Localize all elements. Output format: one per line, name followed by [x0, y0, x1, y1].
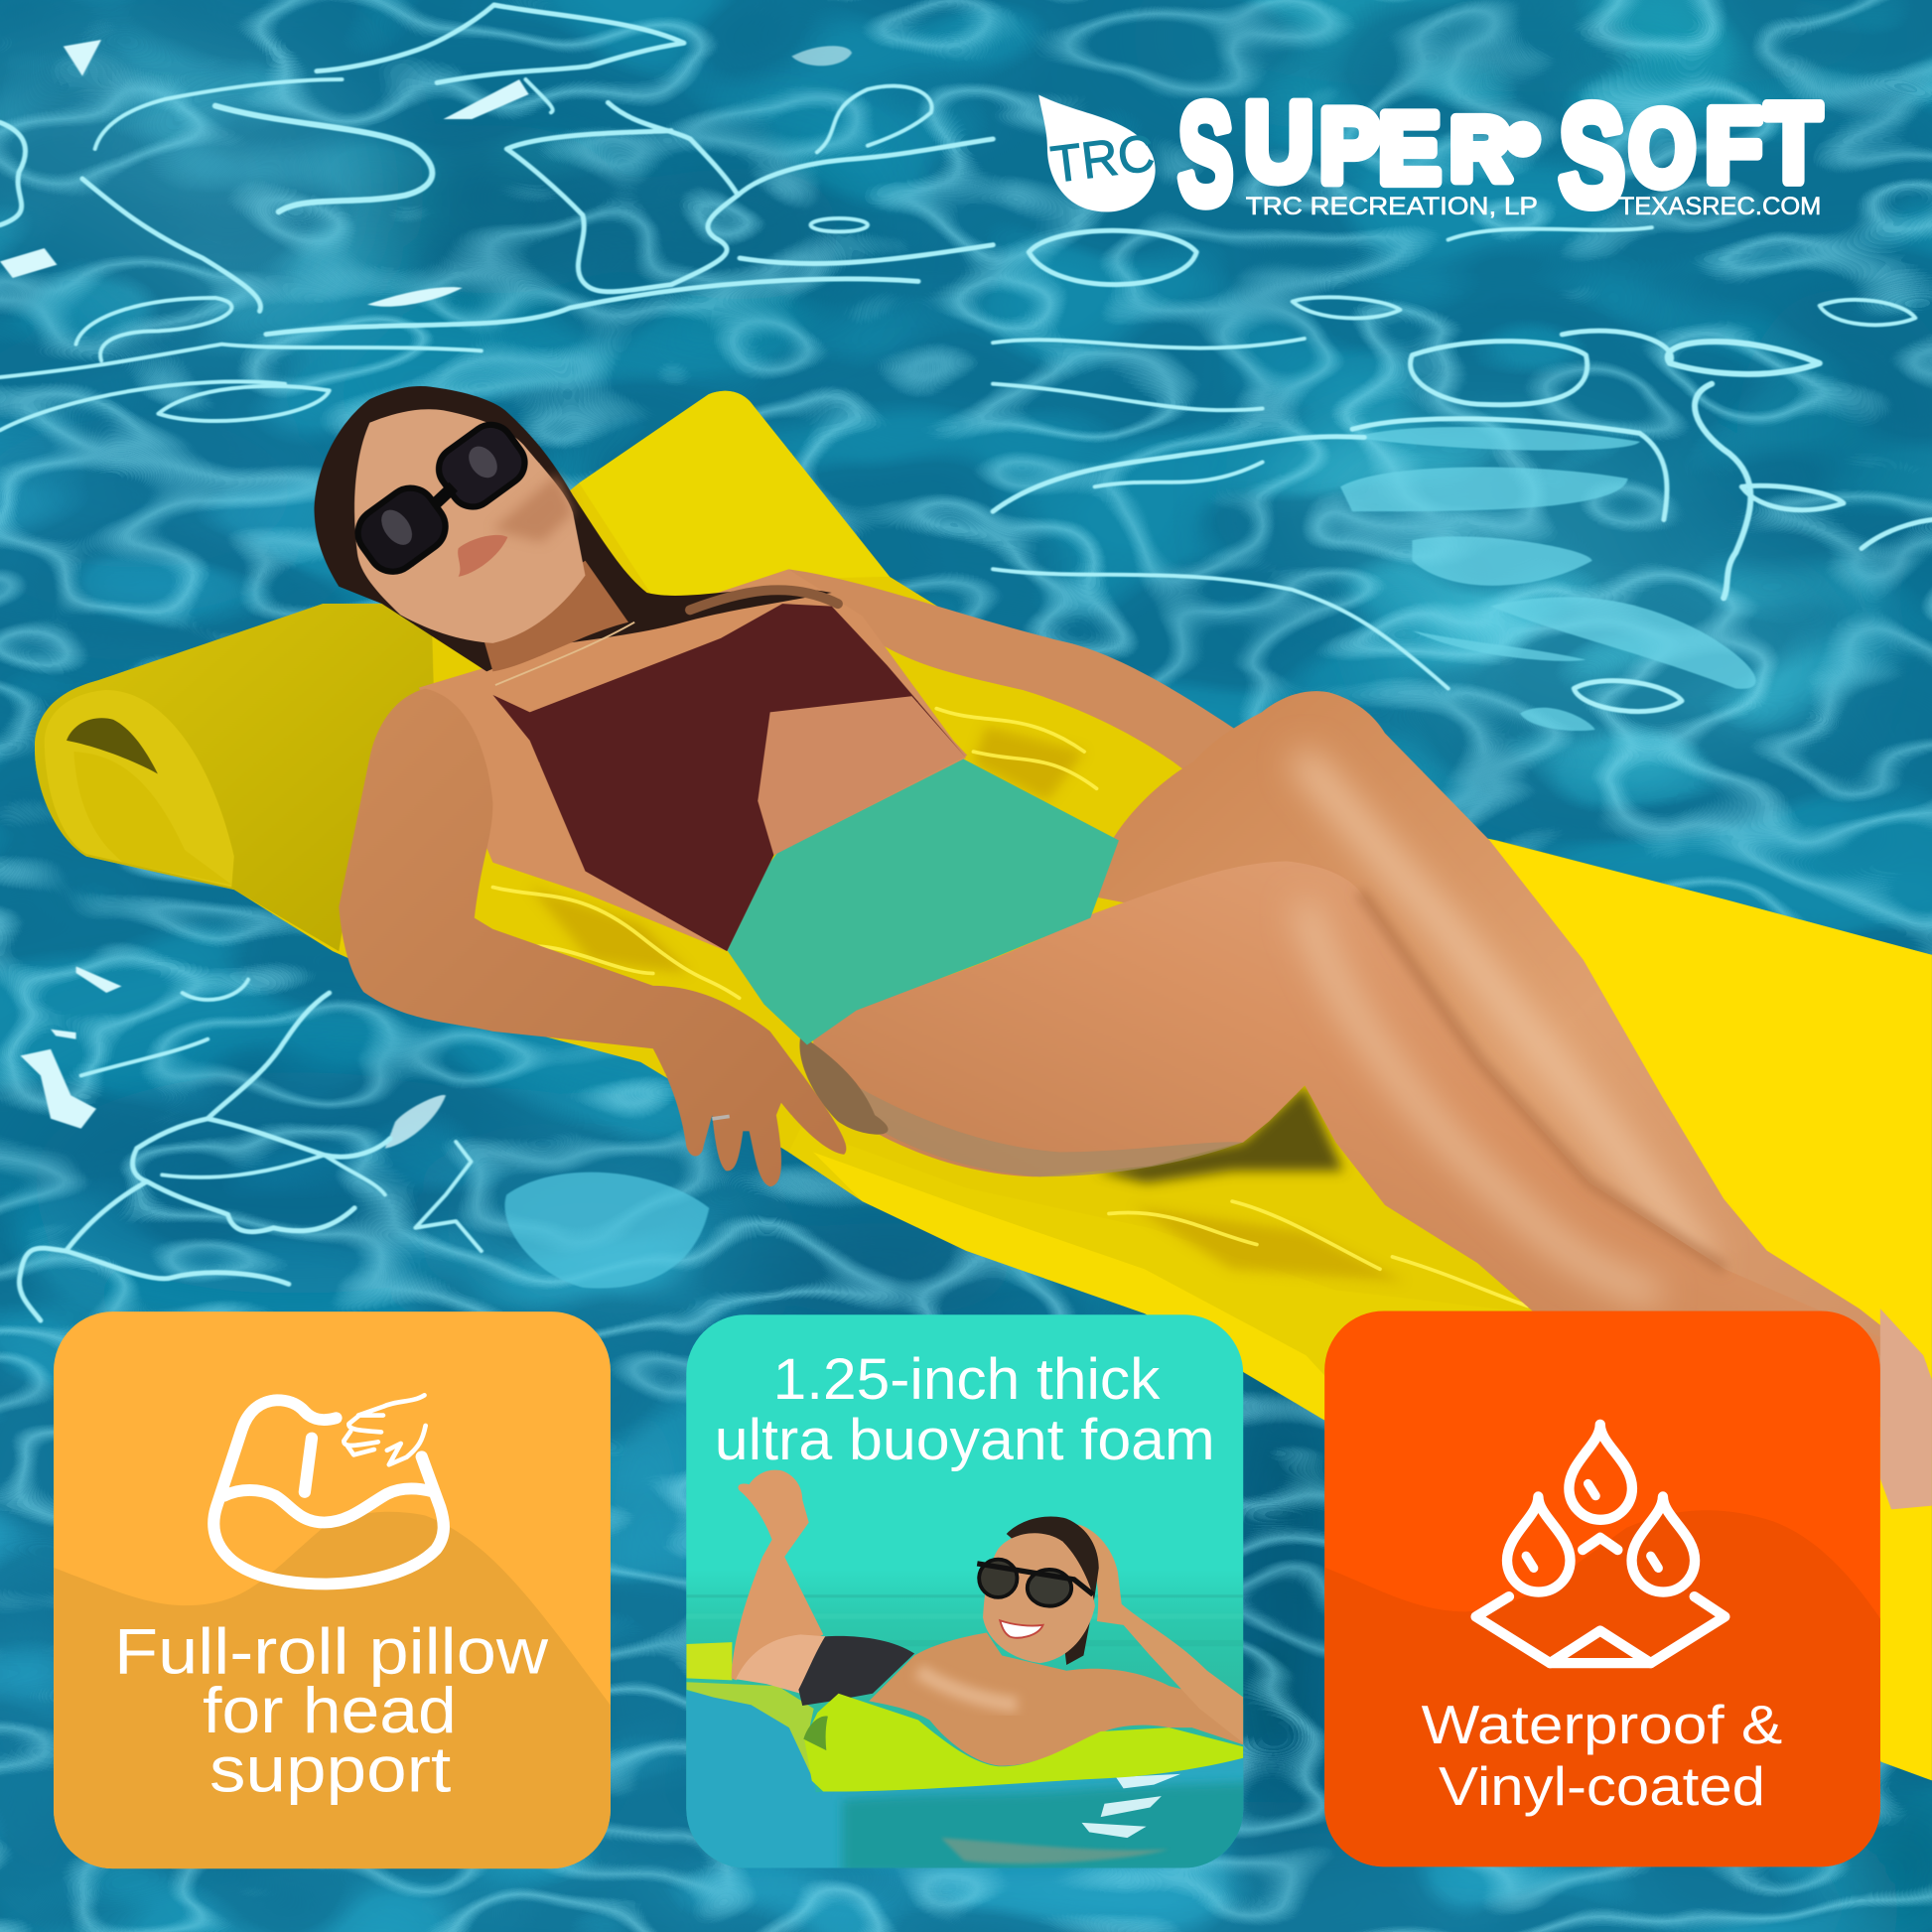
sunglasses — [348, 416, 533, 582]
far leg sheen — [1307, 763, 1701, 1257]
card text: for head — [203, 1675, 457, 1746]
logo TRC: TRC — [1047, 124, 1158, 195]
caustics lower left — [19, 966, 709, 1320]
card wave — [53, 1512, 617, 1872]
card text: support — [209, 1734, 451, 1806]
foot — [1880, 1309, 1932, 1509]
light reflections — [1082, 1774, 1180, 1838]
logo wordmark: O — [1629, 88, 1696, 207]
logo wordmark: E — [1379, 94, 1441, 205]
inset photo — [675, 1470, 1271, 1886]
panel: waterproof — [1324, 1311, 1881, 1872]
card wave — [1324, 1510, 1881, 1872]
lower water — [686, 1692, 1243, 1868]
panel: full-roll pillow — [53, 1311, 617, 1872]
dark reflection — [842, 1781, 1271, 1875]
near arm and hand — [339, 689, 846, 1186]
raised arm — [1078, 1524, 1243, 1742]
card background — [1324, 1311, 1880, 1866]
leg separation shade — [1360, 893, 1725, 1269]
swimsuit — [798, 1636, 914, 1706]
thigh underwater edge — [813, 1059, 1243, 1176]
logo wordmark: T — [1765, 80, 1821, 205]
pool surface — [675, 1594, 1271, 1646]
card text — [1422, 1695, 1782, 1817]
back and arm — [869, 1632, 1243, 1766]
lips — [458, 535, 507, 577]
logo url: TEXASREC.COM — [1619, 194, 1821, 220]
float head flap — [579, 391, 890, 617]
logo wordmark: F — [1706, 88, 1762, 204]
pillow lower shelf — [73, 752, 231, 885]
near leg sheen — [1307, 911, 1651, 1294]
swimsuit lower teal — [725, 758, 1119, 1044]
card text — [114, 1615, 548, 1806]
caustics right — [993, 227, 1932, 731]
mat far end — [686, 1642, 732, 1680]
icon: pillow and hand — [213, 1395, 444, 1585]
card background — [686, 1314, 1243, 1867]
logo wordmark: R — [1450, 99, 1511, 199]
near leg — [813, 862, 1880, 1355]
far leg — [1095, 691, 1932, 1453]
hip — [736, 1634, 827, 1694]
midriff — [758, 696, 967, 855]
float body — [35, 391, 1932, 1780]
logo wordmark: S — [1177, 74, 1233, 234]
logo: TRC Super-Soft — [1038, 74, 1821, 235]
face — [983, 1533, 1095, 1663]
neck — [481, 561, 628, 671]
bright float end — [1484, 838, 1932, 1780]
float side band — [788, 1128, 1881, 1762]
thigh shadow on float — [1097, 1085, 1343, 1182]
bright side edge — [813, 1152, 1380, 1436]
logo wordmark: U — [1244, 79, 1313, 204]
logo wordmark — [1177, 74, 1821, 235]
ring — [712, 1116, 730, 1119]
hair ends — [690, 590, 838, 610]
card text: Full-roll pillow — [114, 1615, 548, 1687]
card text: Vinyl-coated — [1439, 1756, 1765, 1817]
card text: ultra buoyant foam — [715, 1408, 1215, 1472]
submerged ripples — [492, 709, 1528, 1307]
logo wordmark: P — [1319, 88, 1380, 204]
submerged golden areas — [530, 727, 1405, 1282]
pillow roll lip — [45, 690, 234, 888]
smile — [1000, 1620, 1042, 1638]
hip underwater ripple — [799, 1035, 889, 1135]
caustics upper left — [0, 5, 993, 430]
brown reflection — [941, 1838, 1170, 1863]
logo wordmark: S — [1559, 75, 1625, 235]
product: yellow foam float — [35, 391, 1932, 1780]
logo dot — [1504, 121, 1542, 158]
face shade — [492, 475, 573, 542]
pillow hole — [67, 718, 158, 773]
logo subtitle: TRC RECREATION, LP — [1246, 194, 1538, 220]
far arm — [788, 569, 1254, 773]
panel: ultra buoyant foam — [675, 1314, 1271, 1886]
necklace — [495, 622, 634, 685]
swimsuit top maroon — [492, 604, 966, 951]
card text: 1.25-inch thick — [773, 1347, 1161, 1412]
legs — [732, 1470, 823, 1680]
card text — [715, 1347, 1215, 1472]
mat hole — [803, 1716, 828, 1750]
card text: Waterproof & — [1422, 1695, 1782, 1755]
mat front — [804, 1694, 1243, 1792]
hair — [314, 386, 832, 671]
arm highlight — [918, 1671, 1017, 1705]
face — [354, 409, 586, 643]
hair — [1007, 1516, 1099, 1665]
upper torso skin — [419, 569, 966, 951]
float pillow roll — [35, 604, 434, 951]
mat middle — [686, 1682, 816, 1785]
card background — [54, 1311, 611, 1868]
woman lounging — [314, 386, 1932, 1509]
small sunglasses — [977, 1560, 1093, 1606]
icon: drops and coated layer — [1476, 1425, 1725, 1663]
logo drop — [1038, 95, 1156, 211]
